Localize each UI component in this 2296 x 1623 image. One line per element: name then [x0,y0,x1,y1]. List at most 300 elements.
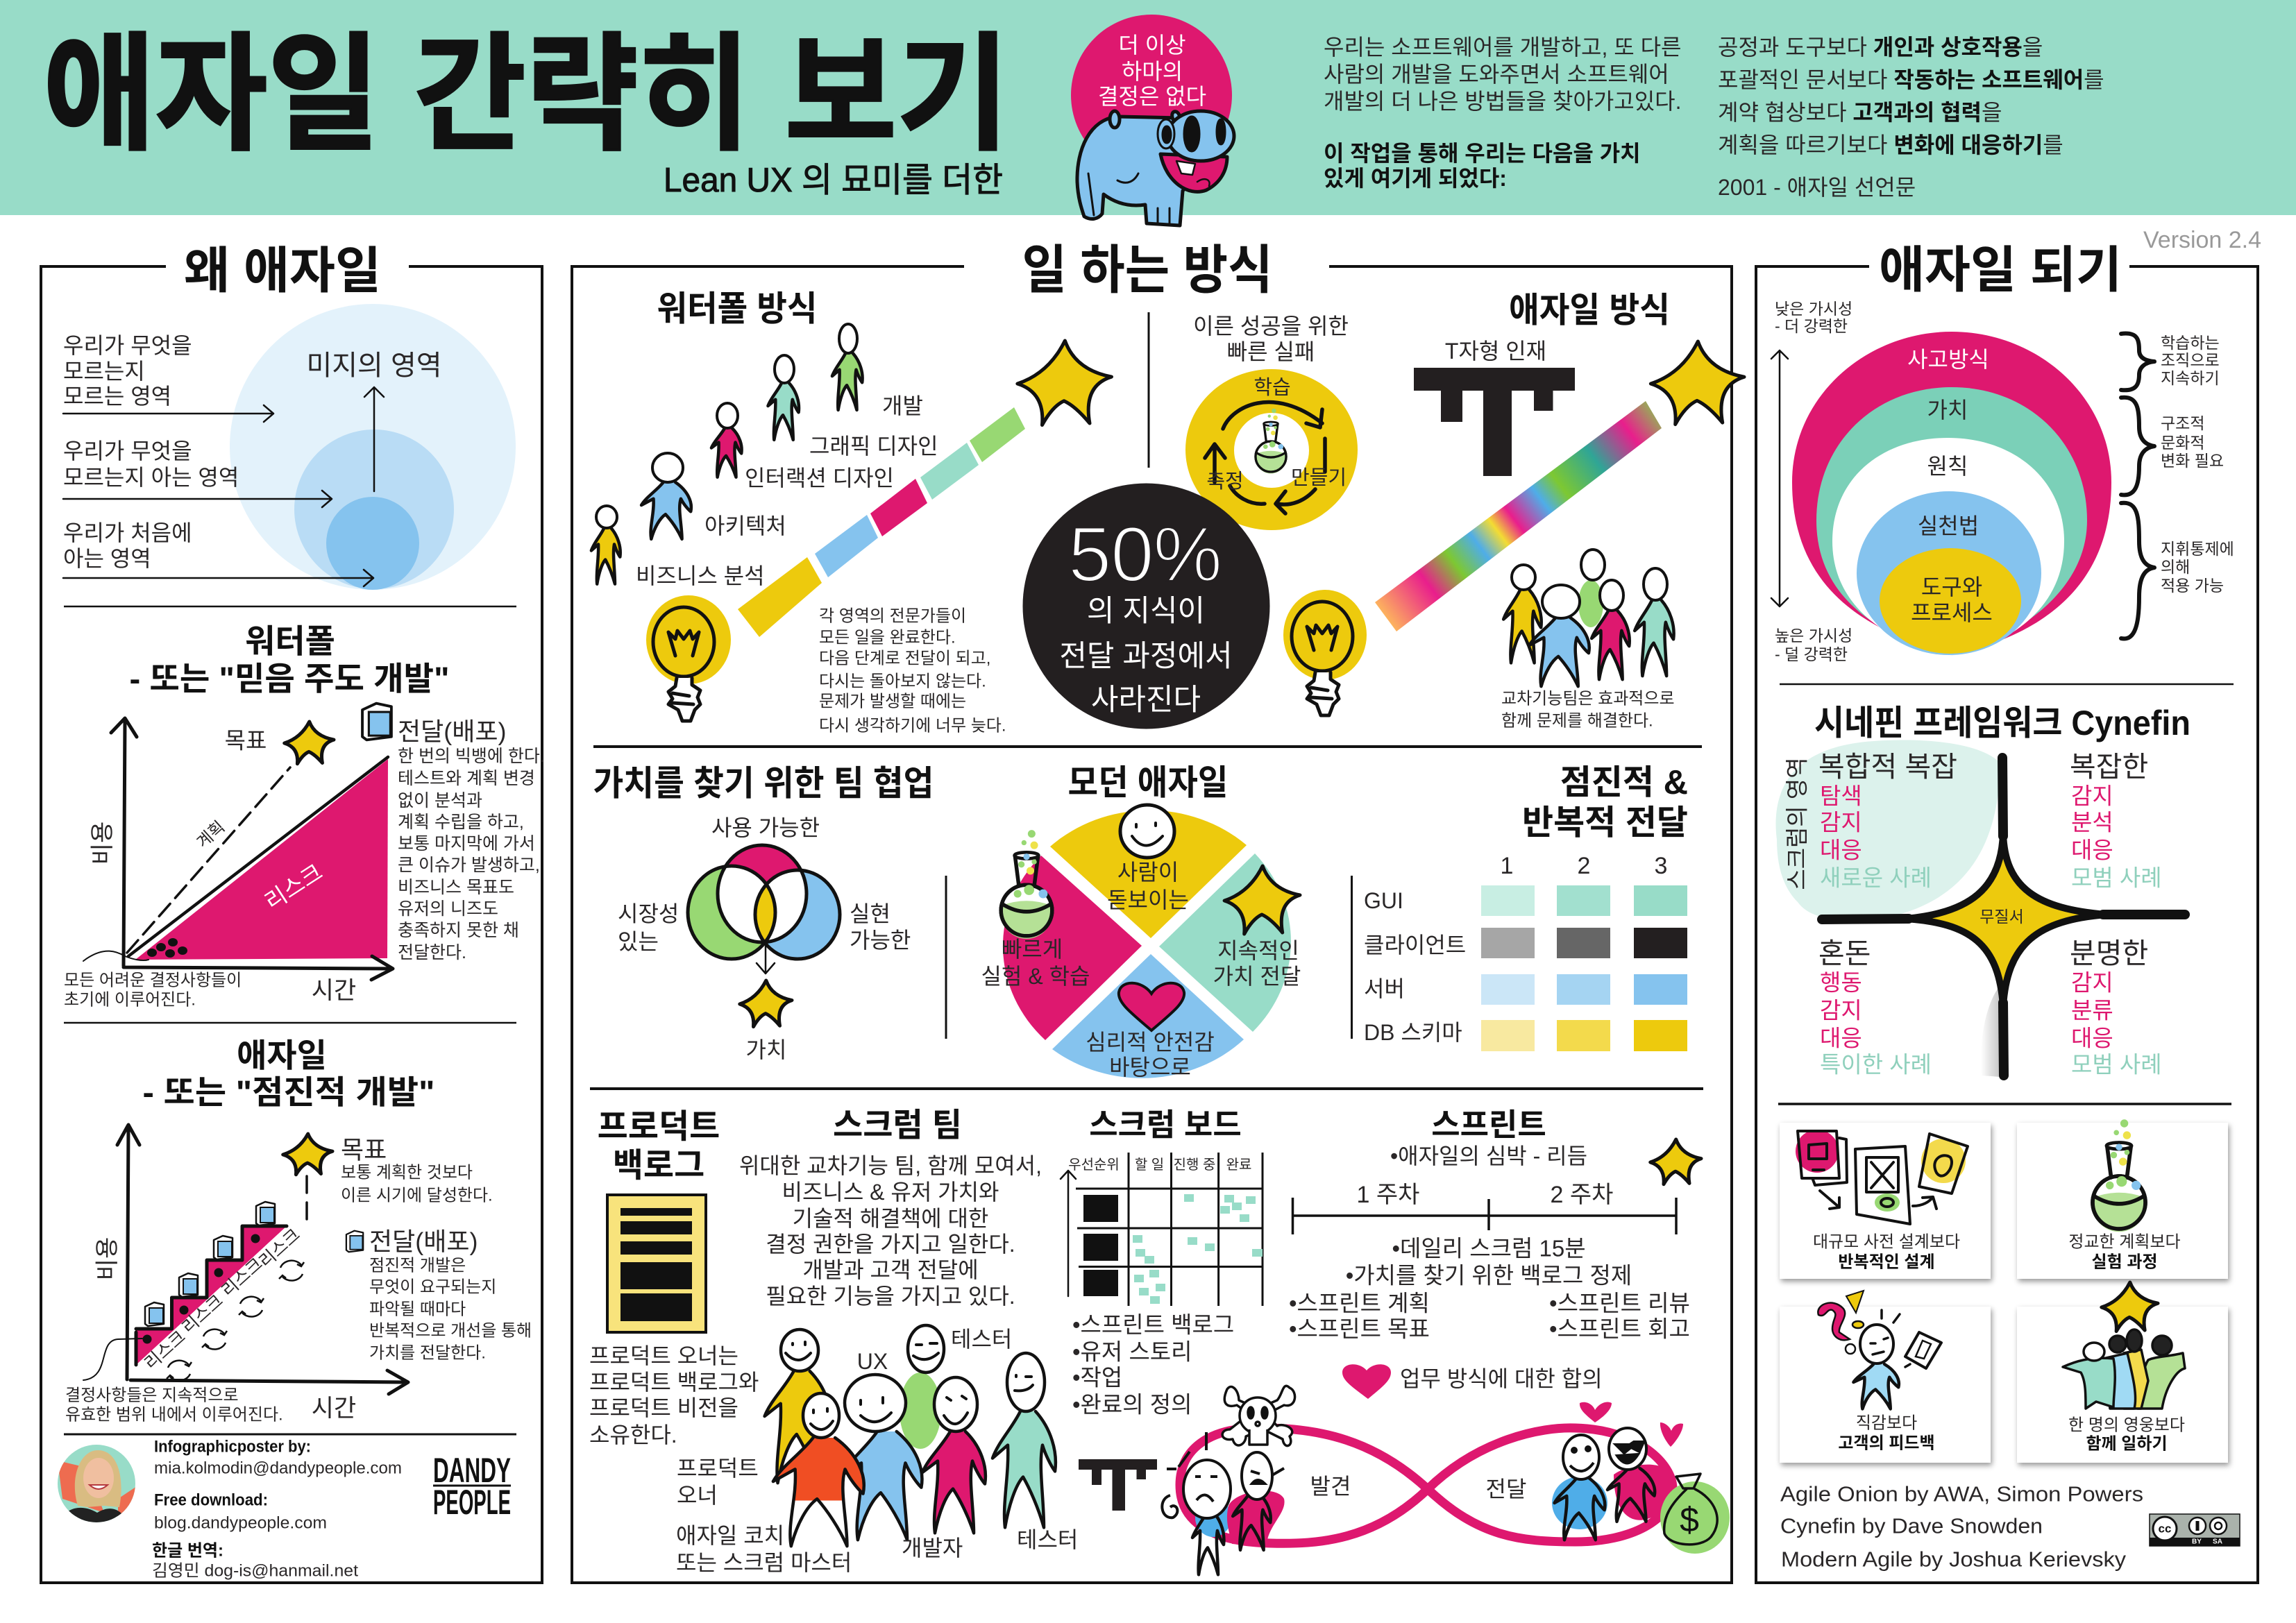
quadrant: complicated: 복잡한 [2070,751,2148,783]
board headers: 완료 [1226,1157,1251,1173]
quadrant: complex: 감지 [1820,809,1862,835]
unknown circles diagram: 우리가 처음에 [63,520,192,545]
pie labels: 돋보이는 [1107,887,1189,912]
agile delivery text: 무엇이 요구되는지 [369,1278,496,1296]
team labels [676,1327,1078,1575]
icon: star [2102,1282,2158,1332]
venn labels: 시장성 [618,901,679,926]
quadrant: complicated: 대응 [2071,837,2113,863]
waterfall note: 다음 단계로 전달이 되고, [819,649,990,668]
section: incremental delivery [1364,764,1688,1051]
agile goal text: 이른 시기에 달성한다. [341,1187,493,1205]
team labels: 개발자 [902,1536,963,1561]
sprint timeline [1292,1182,1676,1234]
section: waterfall way [591,289,1112,736]
quadrant: complex: 새로운 사례 [1820,865,1932,891]
team description: 기술적 해결책에 대한 [793,1206,988,1231]
backlog note: 프로덕트 비전을 [589,1395,738,1420]
waterfall risk chart: 리스크 [260,859,327,915]
cynefin star: 무질서 [1980,908,2024,926]
role labels [636,393,938,588]
author credits: blog.dandypeople.com [154,1514,327,1532]
section: team collaboration [593,764,934,1062]
icon: star [1651,341,1744,425]
panel: how we work [572,241,1744,1583]
backlog note: 소유한다. [589,1422,677,1447]
card: working together: 한 명의 영웅보다 [2068,1416,2185,1435]
icon: hippo [1077,111,1234,226]
role labels: 비즈니스 분석 [636,563,765,588]
subheading: 반복적 전달 [1522,804,1688,842]
column numbers [1501,853,1667,879]
brace labels: 조직으로 [2161,351,2220,369]
agile delivery text [346,1227,532,1363]
agile goal text: 보통 계획한 것보다 [341,1163,473,1182]
unknown circles diagram: 우리가 무엇을 [63,439,192,464]
waterfall note: 다시는 돌아보지 않는다. [819,672,986,691]
team labels: 테스터 [1017,1527,1078,1552]
row labels: 서버 [1364,976,1405,1001]
brace labels: 학습하는 [2161,334,2220,352]
pie labels [981,860,1301,1080]
card: customer feedback: 직감보다 [1856,1414,1917,1432]
backlog note: 프로덕트 오너는 [589,1343,738,1368]
quadrant: chaos: 혼돈 [1818,937,1871,969]
quadrant: complicated: 감지 [2071,783,2113,809]
quadrant: complex: 탐색 [1820,783,1862,809]
unknown circles diagram [63,304,516,590]
phase bars [738,407,1025,637]
waterfall delivery text: 비즈니스 목표도 [398,878,514,897]
board headers: 진행 중 [1174,1157,1215,1173]
manifesto values [1718,35,2104,200]
waterfall decisions note: 모든 어려운 결정사항들이 [64,971,242,989]
icon: T shape [1414,368,1575,476]
icon: skull [1222,1386,1295,1446]
fail fast loop [1185,314,1358,530]
manifesto intro: 있게 여기게 되었다: [1324,166,1507,191]
manifesto values: 포괄적인 문서보다 작동하는 소프트웨어를 [1718,67,2104,92]
speech circle [1071,15,1232,176]
quadrant: clear [2070,937,2162,1077]
brace labels: 변화 필요 [2161,452,2224,470]
heading: 일 하는 방식 [1022,241,1273,300]
T-shaped label: T자형 인재 [1445,339,1546,364]
agile delivery text: 가치를 전달한다. [369,1343,486,1363]
quadrant: complicated [2070,751,2162,891]
visibility axis: - 덜 강력한 [1775,645,1848,663]
pie labels: 지속적인 [1217,938,1299,963]
icon: small T [1079,1459,1157,1511]
agile delivery text: 점진적 개발은 [369,1256,466,1275]
row labels: DB 스키마 [1364,1020,1462,1045]
waterfall delivery text: 테스트와 계획 변경 [398,769,535,788]
stat circle: 50% [1068,511,1222,598]
author credits: Free download: [154,1490,268,1510]
team illustration [765,1325,1056,1546]
waterfall note: 다시 생각하기에 너무 늦다. [819,716,1006,736]
quadrant: chaos: 행동 [1820,970,1862,995]
brace labels: 의해 [2161,558,2190,576]
brace labels: 지휘통제에 [2161,540,2234,558]
sprint events: •스프린트 계획 [1289,1291,1430,1316]
waterfall decisions note: 초기에 이루어진다. [64,991,196,1009]
callout text: 하마의 [1122,59,1183,84]
agile onion: 도구와 [1921,575,1982,600]
row labels: 클라이언트 [1364,933,1466,958]
card: working together: 함께 일하기 [2086,1435,2168,1453]
pie labels: 심리적 안전감 [1086,1030,1215,1055]
heading: 시네핀 프레임워크 Cynefin [1814,704,2191,742]
icon: design pages [1796,1130,1968,1224]
card: iterative design [1780,1123,1991,1279]
hippo callout [1071,15,1234,226]
role labels: 인터랙션 디자인 [745,466,894,491]
quadrant: clear: 분류 [2071,998,2113,1023]
team caption [1501,690,1675,730]
agile delivery text: 파악될 때마다 [369,1300,466,1318]
sprint timeline: 1 주차 [1357,1182,1419,1208]
waterfall delivery text: 계획 수립을 하고, [398,813,524,832]
pie labels: 빠르게 [1002,937,1063,962]
board list: •완료의 정의 [1072,1392,1192,1417]
waterfall decisions note [64,971,242,1009]
card: experiments: 실험 과정 [2092,1253,2157,1271]
card: experiments [2017,1119,2228,1279]
heading: agile: - 또는 "점진적 개발" [143,1074,434,1110]
agile risk chart: 비용 [94,1237,121,1280]
heading: 애자일 되기 [1879,243,2122,298]
team labels: 프로덕트 [677,1456,759,1481]
version label: Version 2.4 [2143,227,2261,253]
subheading: 애자일 방식 [1509,291,1670,330]
stat circle: 사라진다 [1091,683,1201,717]
cc license badge: SA [2213,1538,2222,1546]
board list [1072,1311,1234,1417]
brace labels: 구조적 [2161,414,2204,432]
venn labels: 있는 [618,929,659,954]
sprint events [1289,1235,1690,1342]
row labels: GUI [1364,888,1403,913]
column numbers: 2 [1578,853,1590,879]
agile risk chart [83,1125,408,1422]
author credits [152,1438,402,1581]
card: experiments: 정교한 계획보다 [2068,1232,2181,1252]
venn labels: 가치 [746,1037,786,1062]
icon: heart [1119,983,1184,1030]
zone label: 스크럼의 영역 [1784,757,1810,890]
waterfall risk chart: 시간 [312,977,356,1005]
waterfall note [819,606,1006,736]
icon: flask [1001,830,1052,939]
backlog note: 프로덕트 백로그와 [589,1370,759,1395]
author credits: mia.kolmodin@dandypeople.com [154,1459,402,1478]
author photo [58,1445,135,1522]
unknown circles diagram: 우리가 무엇을 [63,333,192,358]
brace labels: 적용 가능 [2161,577,2224,595]
role labels: 그래픽 디자인 [809,434,938,459]
visibility axis: - 더 강력한 [1775,317,1848,335]
waterfall note: 각 영역의 전문가들이 [819,606,966,626]
board list: •유저 스토리 [1072,1339,1192,1364]
venn labels: 가능한 [850,928,911,953]
quadrant: clear: 분명한 [2070,937,2148,969]
brace labels: 문화적 [2161,434,2204,452]
cc license badge: BY [2192,1538,2202,1546]
venn labels: 사용 가능한 [711,815,820,840]
stat circle: 전달 과정에서 [1059,640,1233,673]
icon: smiley [1120,805,1174,858]
quadrant: chaos: 대응 [1820,1026,1862,1051]
cc license badge: cc [2159,1522,2171,1535]
fail fast loop: 만들기 [1291,467,1347,489]
agile goal text: 목표 [341,1135,387,1164]
pie wheel [1003,810,1291,1078]
pie labels: 가치 전달 [1213,964,1301,989]
unknown circles diagram: 모르는지 아는 영역 [63,465,239,490]
logo: dandy people: PEOPLE [433,1483,511,1522]
fail fast loop: 측정 [1206,470,1244,493]
icon: group hero [2063,1329,2185,1409]
manifesto values: 공정과 도구보다 개인과 상호작용을 [1718,35,2043,60]
manifesto values: 계약 협상보다 고객과의 협력을 [1718,100,2002,125]
section: sprint [1289,1107,1701,1342]
quadrant: complex: 대응 [1820,837,1862,863]
board list: •스프린트 백로그 [1072,1311,1234,1338]
brace labels: 지속하기 [2161,369,2220,387]
board list: •작업 [1072,1364,1122,1391]
unknown circles diagram: 아는 영역 [63,546,151,571]
waterfall delivery text: 한 번의 빅뱅에 한다. [398,747,545,766]
author credits: Infographicposter by: [154,1438,311,1456]
sprint events: •스프린트 목표 [1289,1316,1430,1342]
subheading: 백로그 [613,1148,704,1184]
heading: waterfall: 워터폴 [245,623,335,659]
section: scrum board [1061,1107,1263,1417]
agile goal text [341,1135,493,1205]
logo: dandy people: DANDY [433,1451,511,1490]
subheading: 스프린트 [1431,1107,1546,1142]
credits: Cynefin by Dave Snowden [1780,1514,2043,1538]
heading: waterfall [129,623,450,697]
backlog card [607,1195,706,1332]
waterfall delivery text: 없이 분석과 [398,791,482,810]
subheading: 가치를 찾기 위한 팀 협업 [593,764,934,803]
loop labels: 발견 [1310,1474,1351,1499]
agile onion: 가치 [1927,398,1968,423]
sprint events: •스프린트 회고 [1549,1316,1690,1342]
waterfall risk chart: 비용 [90,822,116,865]
quadrant: clear: 대응 [2071,1026,2113,1051]
team description: 개발과 고객 전달에 [802,1257,979,1282]
fail fast loop: 이른 성공을 위한 [1193,314,1349,339]
infinity loop [1180,1428,1673,1543]
card: customer feedback: 고객의 피드백 [1838,1434,1935,1453]
credits: Agile Onion by AWA, Simon Powers [1780,1482,2143,1506]
agile risk chart: 시간 [312,1395,356,1422]
waterfall risk chart [83,704,393,1005]
author credits: 한글 번역: [152,1542,223,1560]
icon: star [1651,1139,1701,1184]
quadrant: complicated: 모범 사례 [2071,865,2162,891]
loop labels: 전달 [1486,1477,1526,1502]
team description: 결정 권한을 가지고 일한다. [766,1232,1015,1257]
agile risk chart: 리스크 [218,1255,267,1300]
unknown circles diagram: 모르는지 [63,359,145,384]
subheading [598,1109,720,1184]
agile risk chart: 리스크 [255,1225,304,1271]
visibility axis [1771,300,1852,663]
waterfall delivery text: 큰 이슈가 발생하고, [398,856,540,875]
quadrant: clear: 감지 [2071,970,2113,995]
team caption: 함께 문제를 해결한다. [1501,712,1653,730]
fail fast loop: 빠른 실패 [1227,339,1315,364]
agile delivery text: 반복적으로 개선을 통해 [369,1321,532,1341]
manifesto intro [1324,35,1681,191]
credits: Modern Agile by Joshua Kerievsky [1781,1547,2127,1571]
agile onion: 프로세스 [1911,600,1993,625]
team labels: 또는 스크럼 마스터 [676,1550,852,1575]
section: product backlog [589,1109,759,1447]
manifesto intro: 이 작업을 통해 우리는 다음을 가치 [1324,141,1641,166]
column numbers: 1 [1501,853,1513,879]
icon: flask [2093,1119,2145,1232]
agile onion: 원칙 [1927,454,1968,479]
unknown circles diagram: 모르는 영역 [63,384,171,409]
discovery delivery loop [1079,1386,1730,1574]
callout text: 결정은 없다 [1098,84,1206,109]
visibility axis: 낮은 가시성 [1775,300,1852,318]
icon: bulb [1283,590,1367,715]
card: customer feedback [1780,1291,1991,1463]
working agreement: 업무 방식에 대한 합의 [1400,1366,1603,1391]
author credits: 김영민 dog-is@hanmail.net [152,1561,358,1581]
brace labels [2161,334,2234,595]
waterfall delivery text: 보통 마지막에 가서 [398,834,535,853]
role labels: 아키텍처 [704,513,786,538]
row labels [1364,888,1466,1045]
waterfall risk chart: 목표 [225,727,267,754]
panel: why agile [41,244,545,1583]
waterfall risk chart: 계획 [194,817,228,852]
pie labels: 사람이 [1117,860,1179,885]
card: iterative design: 반복적인 설계 [1838,1253,1935,1271]
cc license badge [2150,1514,2240,1546]
manifesto values: 계획을 따르기보다 변화에 대응하기를 [1718,133,2063,158]
agile risk chart: 리스크 [178,1291,227,1337]
agile onion: 실천법 [1918,513,1979,538]
section: scrum team [676,1106,1078,1575]
icon: star [1224,866,1300,934]
subheading: 모던 애자일 [1067,763,1229,802]
card: working together [2017,1282,2228,1463]
header band [0,0,2296,215]
quadrant: chaos [1818,937,1932,1077]
icon: money bag [1660,1474,1730,1554]
agile delivery text: 전달(배포) [369,1227,478,1256]
stat circle: 의 지식이 [1087,595,1205,628]
subheading [1522,764,1688,842]
quadrant: complex: 복합적 복잡 [1818,751,1957,783]
quadrant: complex [1818,751,1957,891]
section: modern agile [981,763,1301,1080]
icon: heart [1342,1364,1391,1399]
section: cynefin [1776,704,2191,1077]
venn labels: 실현 [850,901,890,926]
team labels: 오너 [677,1483,718,1508]
card: iterative design: 대규모 사전 설계보다 [1813,1232,1960,1252]
agile onion [1792,332,2111,656]
heading: 왜 애자일 [184,244,381,299]
quadrant: chaos: 특이한 사례 [1820,1052,1932,1077]
board headers [1068,1157,1251,1173]
column numbers: 3 [1655,853,1667,879]
board headers: 할 일 [1135,1157,1164,1173]
callout text [1098,33,1206,109]
icon: hearts [1580,1402,1683,1447]
team labels: 애자일 코치 [676,1523,784,1548]
scrum zone blob [1776,740,2000,920]
cross functional team [1503,550,1674,686]
waterfall delivery text: 전달한다. [398,943,466,962]
manifesto intro: 사람의 개발을 도와주면서 소프트웨어 [1324,62,1669,87]
stat circle [1023,483,1270,729]
agile onion: 사고방식 [1907,347,1989,372]
quadrant: clear: 모범 사례 [2071,1052,2162,1077]
quadrant: complicated: 분석 [2071,809,2113,835]
sprint timeline: 2 주차 [1551,1182,1613,1208]
waterfall delivery text: 유저의 니즈도 [398,899,498,919]
section: agile way [1283,291,1744,730]
loop labels [1310,1474,1526,1502]
team description [739,1153,1042,1309]
icon: person with feedback [1818,1291,1941,1409]
manifesto values: 2001 - 애자일 선언문 [1718,175,1916,200]
subheading: 스크럼 팀 [833,1106,962,1144]
heading: agile: 애자일 [237,1037,327,1074]
subheading: 점진적 & [1560,764,1688,801]
venn diagram [688,845,840,1027]
board grid [1061,1153,1263,1306]
sprint events: •데일리 스크럼 15분 [1392,1235,1586,1261]
board headers: 우선순위 [1068,1157,1120,1173]
sprint intro: •애자일의 심박 - 리듬 [1390,1144,1587,1169]
visibility axis: 높은 가시성 [1775,627,1852,645]
quadrant: chaos: 감지 [1820,998,1862,1023]
icon: money bag: $ [1680,1500,1699,1539]
credits [1780,1482,2143,1571]
callout text: 더 이상 [1118,33,1186,58]
subheading: 프로덕트 [598,1109,720,1145]
cynefin star [1822,758,2185,1077]
subtitle: Lean UX 의 묘미를 더한 [664,162,1003,199]
agile risk chart: 리스크 [141,1327,189,1373]
waterfall delivery text [398,717,545,962]
title: 애자일 간략히 보기 [43,23,1009,166]
subheading: 스크럼 보드 [1089,1107,1242,1142]
agile decisions note: 유효한 범위 내에서 이루어진다. [65,1406,283,1424]
icon: bulb [646,595,731,721]
team labels: UX [857,1349,888,1374]
pie labels: 실험 & 학습 [981,964,1090,989]
heading: agile [143,1037,434,1110]
team description: 비즈니스 & 유저 가치와 [782,1180,999,1205]
delivery grid [1481,885,1687,1051]
rainbow bar [1375,401,1662,631]
team labels: 테스터 [951,1327,1012,1352]
waterfall note: 모든 일을 완료한다. [819,629,956,647]
team description: 필요한 기능을 가지고 있다. [766,1284,1015,1309]
